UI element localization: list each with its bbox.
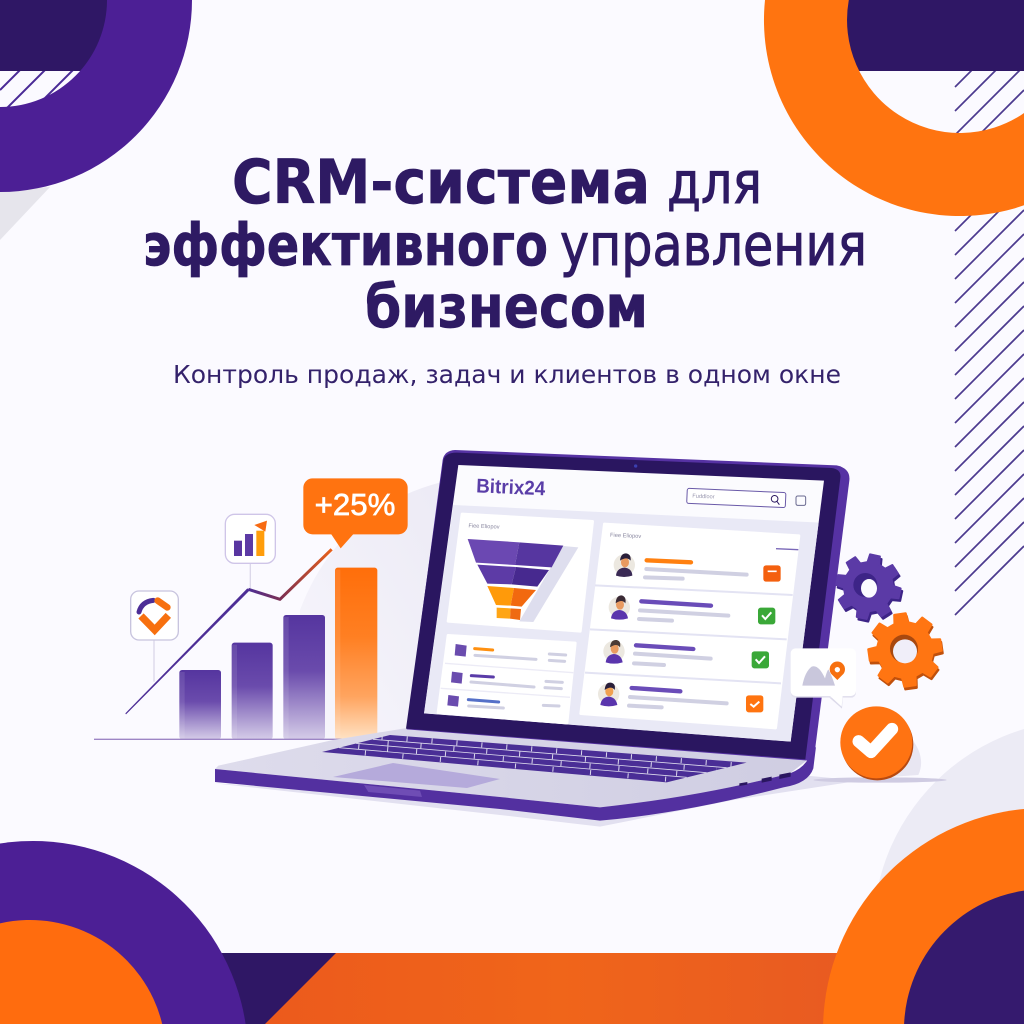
title: управления — [560, 211, 867, 279]
icon: funnel logo — [131, 591, 178, 640]
decoration: bottom band — [215, 953, 854, 1024]
laptop shadow — [215, 775, 859, 827]
search box: Fuddloor — [692, 494, 715, 501]
icon: orange gear — [864, 609, 947, 694]
icon: purple gear — [830, 549, 908, 627]
client row 1 — [614, 553, 781, 582]
title — [143, 147, 867, 341]
subtitle: Контроль продаж, задач и клиентов в одном окне — [173, 360, 841, 389]
panel: sales funnel: Fiee Eliopov — [468, 523, 500, 531]
laptop lid — [406, 450, 849, 761]
keyboard — [322, 735, 747, 782]
client row 3 — [603, 640, 769, 668]
callout: +25% — [303, 478, 408, 548]
soft backdrop behind laptop — [300, 480, 450, 740]
client row 2 — [609, 595, 775, 624]
decoration: bottom-left ring — [0, 841, 246, 1024]
client row 4 — [598, 683, 763, 712]
laptop screen — [424, 465, 824, 742]
title: для — [667, 149, 762, 217]
soft wedge below top-left ring — [0, 187, 50, 240]
icon: check badge — [840, 706, 913, 780]
bar 2 — [232, 643, 273, 739]
decoration: top-left ring — [0, 0, 192, 192]
growth chart — [94, 478, 408, 739]
bar 1 — [179, 670, 221, 739]
decoration: top-right ring — [764, 0, 1024, 216]
laptop front edge — [215, 747, 816, 821]
title: эффективного — [143, 211, 548, 279]
window button — [796, 496, 806, 505]
title: CRM-система — [232, 147, 650, 218]
bar 3 — [283, 615, 325, 739]
panel: client list — [581, 524, 799, 728]
panel: client list: Fiee Eliopov — [610, 533, 641, 540]
bar 4 — [335, 568, 377, 739]
ground shadow — [813, 737, 947, 783]
panel: task list — [438, 635, 575, 723]
icon: map card — [791, 648, 856, 709]
trend line — [125, 549, 332, 714]
stripes: right side — [955, 18, 1024, 615]
title: бизнесом — [365, 272, 648, 341]
search box — [687, 488, 786, 508]
panel: sales funnel — [448, 514, 593, 631]
logo: Bitrix24: Bitrix24 — [476, 475, 546, 500]
decoration: bottom-right ring — [823, 809, 1024, 1024]
baseline — [94, 737, 347, 741]
pin stems — [154, 563, 250, 682]
soft backdrop circle bottom right — [873, 729, 1024, 1024]
laptop base — [215, 728, 808, 807]
floating icons — [791, 549, 947, 783]
laptop — [215, 450, 859, 827]
icon: bar growth — [225, 514, 275, 563]
trackpad — [333, 763, 500, 788]
callout: +25%: +25% — [315, 488, 395, 522]
